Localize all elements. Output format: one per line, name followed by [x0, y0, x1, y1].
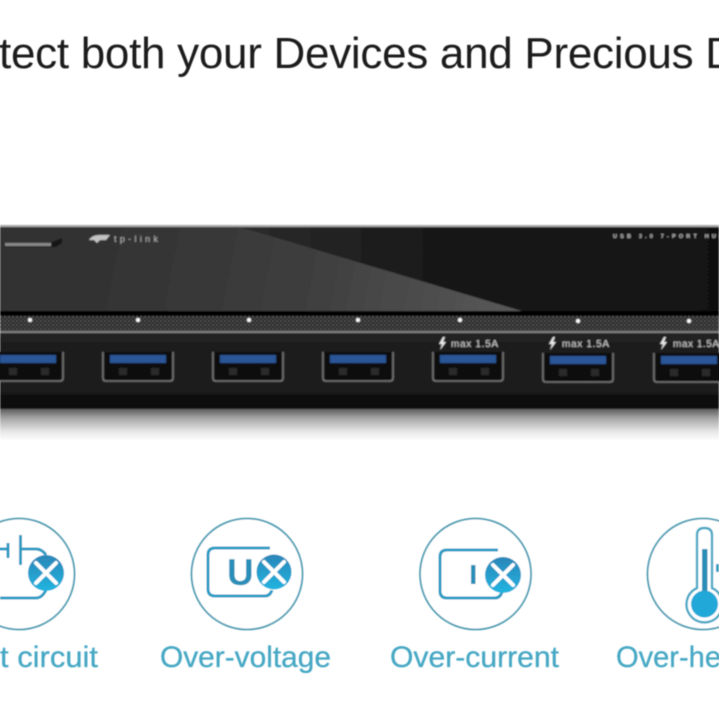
port 5 charging label — [439, 337, 498, 350]
port 5 charging label: max 1.5A — [451, 339, 498, 350]
icon: over-heat thermometer — [648, 518, 719, 630]
icon: over-voltage: U — [227, 552, 254, 593]
label: over-voltage: Over-voltage — [160, 641, 331, 674]
brand logo — [89, 234, 158, 244]
icon: short circuit — [0, 518, 74, 630]
mesh strip with LEDs — [0, 316, 719, 333]
port 7 charging label: max 1.5A — [673, 339, 719, 350]
hub front face — [0, 333, 719, 409]
port 7 charging label — [660, 337, 719, 350]
USB port 1 — [0, 352, 63, 381]
icon: over-voltage — [192, 518, 302, 630]
USB port 2 — [103, 352, 173, 381]
label: short circuit: t circuit — [0, 641, 99, 674]
icon: over-current — [420, 518, 531, 630]
USB port 6 — [543, 353, 613, 382]
USB port 7 — [654, 353, 719, 382]
USB port 5 — [433, 352, 503, 381]
port 6 charging label — [549, 337, 609, 350]
USB hub product photo — [0, 225, 719, 441]
hub top panel — [0, 225, 719, 316]
USB port 4 — [323, 352, 393, 381]
brand logo: tp-link — [114, 234, 158, 244]
port 6 charging label: max 1.5A — [562, 339, 609, 350]
title: tect both your Devices and Precious D — [0, 29, 719, 78]
label: over-current: Over-current — [390, 641, 560, 674]
hub reflection fade — [0, 409, 719, 441]
power button — [4, 238, 62, 247]
USB port 3 — [213, 352, 283, 381]
